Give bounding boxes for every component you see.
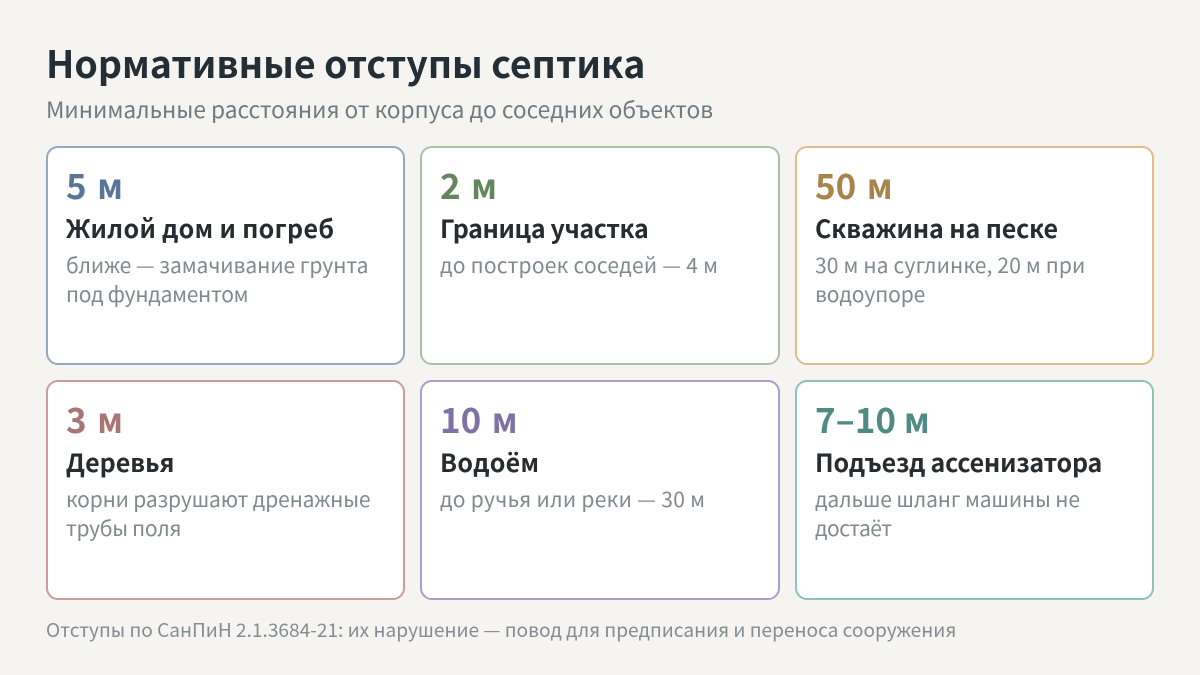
heading: Деревья xyxy=(66,444,174,480)
value: 3 м xyxy=(66,392,123,444)
description xyxy=(66,250,368,308)
panel: water xyxy=(420,380,780,600)
description xyxy=(815,484,1080,542)
footnote: Отступы по СанПиН 2.1.3684-21: их нарушение — повод для предписания и переноса сооружения xyxy=(46,615,956,643)
value: 50 м xyxy=(815,158,893,210)
description: ближе — замачивание грунта xyxy=(66,250,368,280)
heading: Скважина на песке xyxy=(815,210,1058,246)
description: дальше шланг машины не xyxy=(815,484,1080,514)
heading: Жилой дом и погреб xyxy=(66,210,334,246)
subtitle: Минимальные расстояния от корпуса до соседних объектов xyxy=(46,92,713,125)
heading: Водоём xyxy=(440,444,539,480)
heading: Граница участка xyxy=(440,210,648,246)
description: корни разрушают дренажные xyxy=(66,484,370,514)
value: 2 м xyxy=(440,158,497,210)
heading: Подъезд ассенизатора xyxy=(815,444,1102,480)
description xyxy=(66,484,370,542)
value: 5 м xyxy=(66,158,123,210)
description xyxy=(815,250,1085,308)
panel: truck access xyxy=(795,380,1154,600)
description: достаёт xyxy=(815,512,892,542)
panel: house xyxy=(46,146,405,365)
description: трубы поля xyxy=(66,512,181,542)
description: до построек соседей — 4 м xyxy=(440,250,718,280)
value: 7–10 м xyxy=(815,392,930,444)
description: до ручья или реки — 30 м xyxy=(440,484,705,514)
panel: well xyxy=(795,146,1154,365)
description: под фундаментом xyxy=(66,278,248,308)
panel: boundary xyxy=(420,146,780,365)
description: 30 м на суглинке, 20 м при xyxy=(815,250,1085,280)
description: водоупоре xyxy=(815,278,925,308)
title: Нормативные отступы септика xyxy=(46,34,645,89)
value: 10 м xyxy=(440,392,518,444)
panel: trees xyxy=(46,380,405,600)
